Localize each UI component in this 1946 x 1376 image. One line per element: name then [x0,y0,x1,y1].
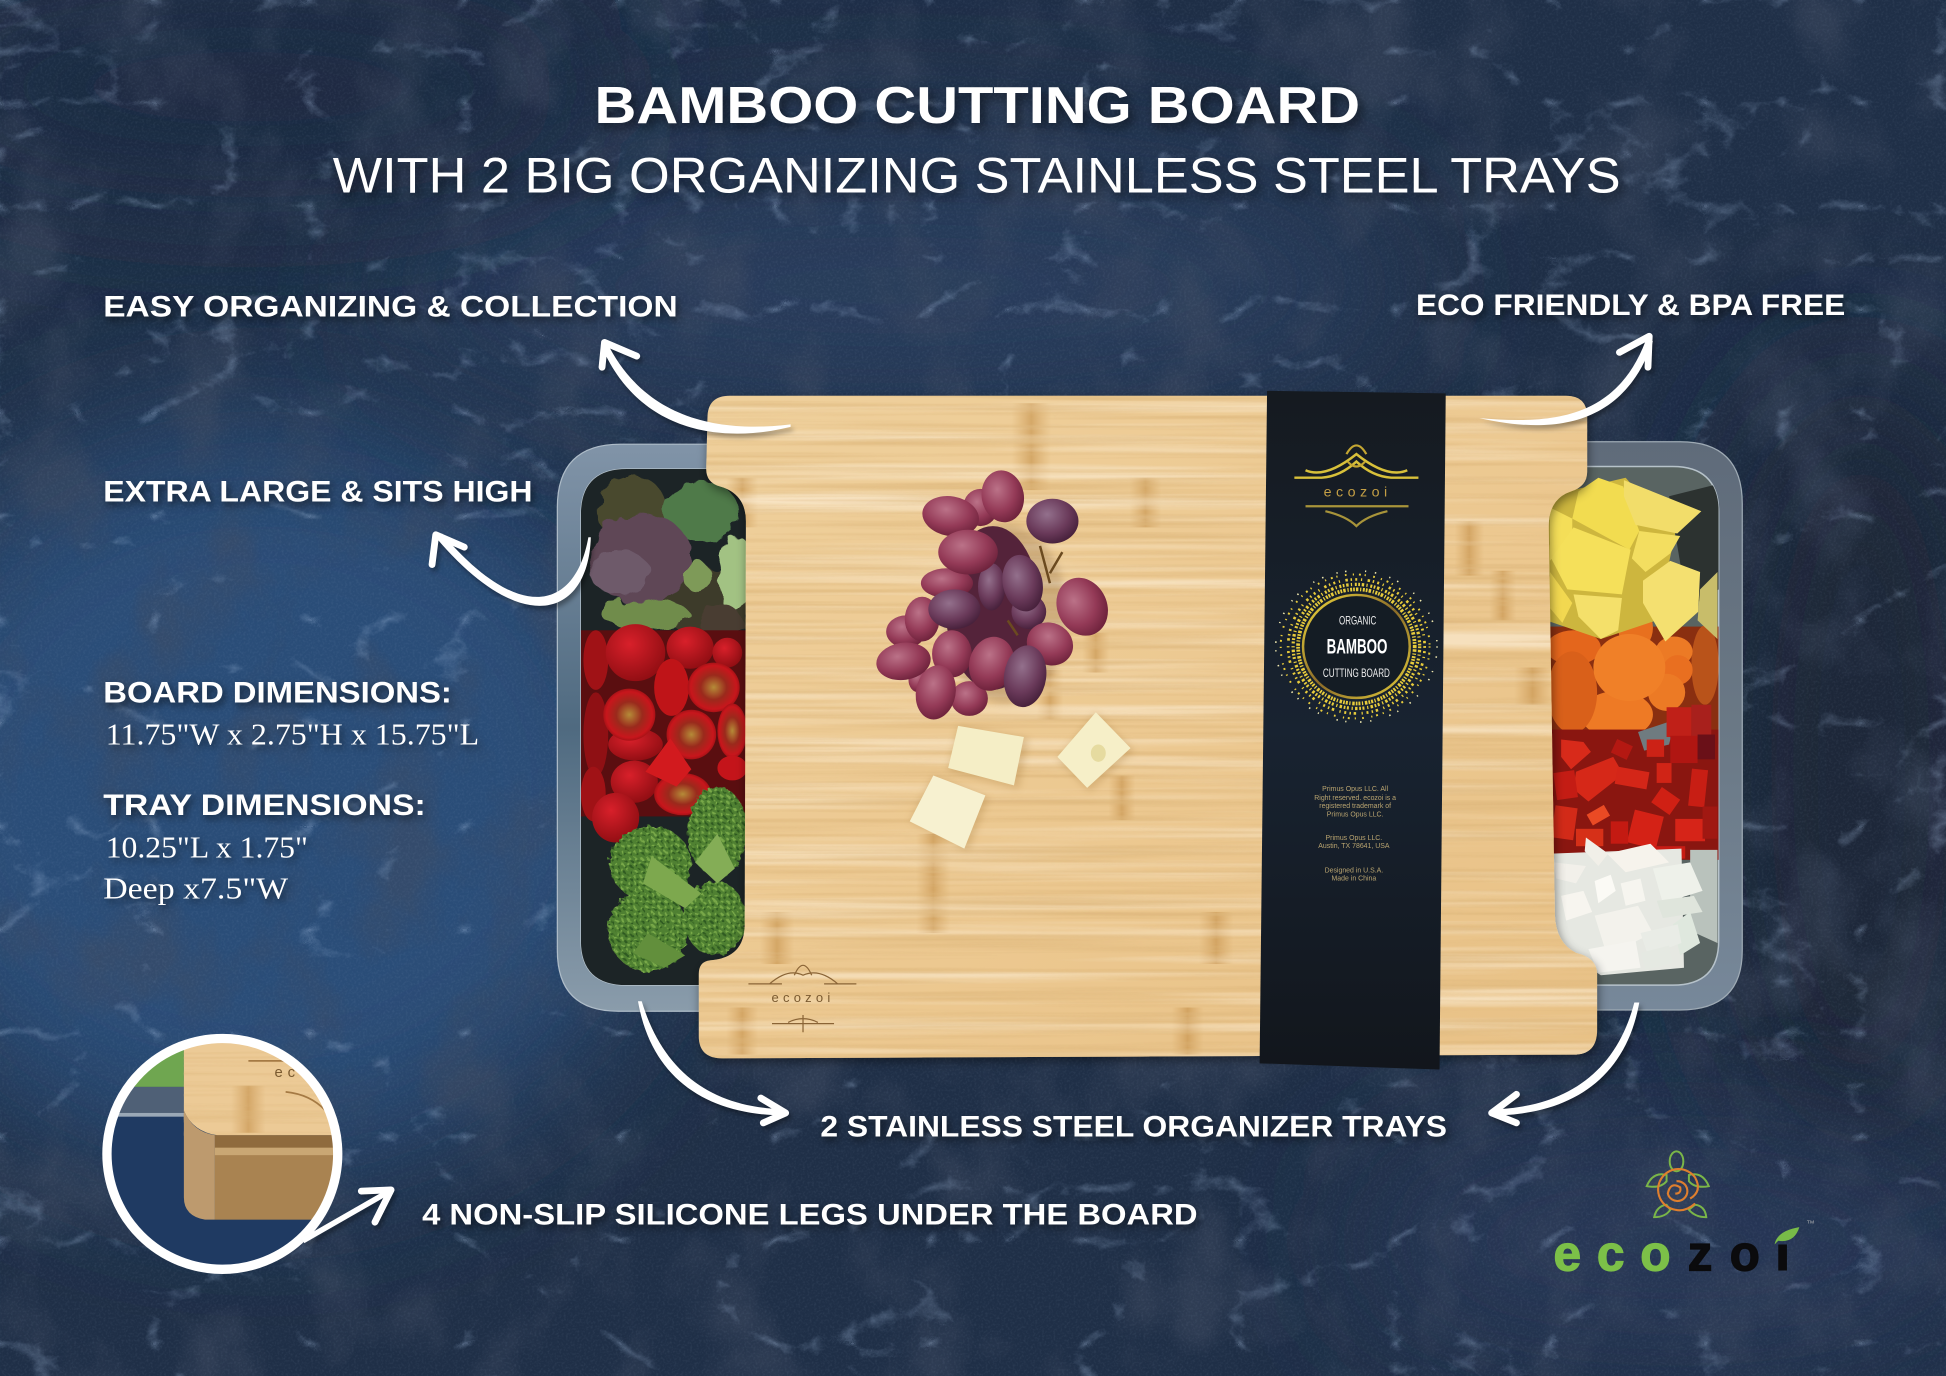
arrow: to easy organizing [602,342,791,434]
dimensions text block: TRAY DIMENSIONS: [103,789,426,822]
right tray food [1546,478,1719,975]
gold brand logo: ecozoi [1324,484,1392,500]
cheese cubes [910,712,1134,851]
dimensions text block: 11.75"W x 2.75"H x 15.75"L [106,716,479,751]
left tray food [581,469,755,985]
arrow: left tray [638,1001,786,1123]
gold glitter [1276,571,1437,722]
wordmark: e [1554,1226,1581,1282]
carrots [1550,622,1719,744]
red peppers [1551,705,1719,860]
bamboo cutting board [695,391,1601,1061]
detail circle: board leg: ec [274,1065,300,1081]
wordmark: TM [1807,1219,1814,1225]
potatoes [1546,478,1717,641]
onions [1551,838,1717,975]
label: trays: 2 STAINLESS STEEL ORGANIZER TRAYS [820,1111,1447,1144]
arrow: to eco friendly [1479,336,1653,425]
left steel tray [557,444,745,1011]
wordmark [1554,1219,1814,1282]
oval badge [1303,595,1410,698]
icon: turtle [1647,1151,1709,1217]
legal text: Austin, TX 78641, USA [1318,843,1390,850]
ecozoi logo [1554,1151,1814,1282]
label: non-slip legs: 4 NON-SLIP SILICONE LEGS UNDER THE BOARD [422,1199,1198,1232]
legal text: Primus Opus LLC. [1326,835,1382,842]
black product band: BAMBOO [1327,635,1387,658]
black product band [1260,391,1446,1070]
label: easy organizing: EASY ORGANIZING & COLLECTION [103,290,678,323]
label: eco friendly: ECO FRIENDLY & BPA FREE [1416,289,1845,322]
legal text: Primus Opus LLC. [1327,811,1384,818]
wordmark: o [1730,1226,1760,1282]
arrow: from circle to legs label [303,1190,391,1241]
arrow: right tray [1492,1003,1639,1123]
legal text: registered trademark of [1319,803,1391,810]
gold brand logo [1294,445,1418,526]
dimensions text block: 10.25"L x 1.75" [106,829,308,864]
legal text: Right reserved. ecozoi is a [1314,795,1396,802]
title: WITH 2 BIG ORGANIZING STAINLESS STEEL TRAYS [333,147,1621,203]
title: BAMBOO CUTTING BOARD [595,77,1360,135]
lettuce [588,476,755,637]
legal text: Primus Opus LLC. All [1322,786,1389,793]
dimensions text block: Deep x7.5"W [103,870,289,905]
broccoli [608,787,747,972]
legal text: Made in China [1332,875,1376,882]
legal text [1314,786,1396,882]
engraved board logo [748,965,856,1032]
legal text: Designed in U.S.A. [1325,867,1383,874]
black product band: CUTTING BOARD [1323,666,1390,680]
tomatoes [581,624,751,842]
label: extra large: EXTRA LARGE & SITS HIGH [103,475,533,508]
dimensions text block [103,676,479,905]
wordmark: c [1597,1226,1625,1282]
grapes [874,467,1117,723]
title [333,77,1621,203]
wordmark: z [1688,1226,1712,1282]
wordmark: o [1640,1226,1671,1282]
engraved board logo: ecozoi [772,990,834,1005]
dimensions text block: BOARD DIMENSIONS: [103,676,452,709]
black product band: ORGANIC [1339,614,1376,628]
arrow: to extra large [432,534,591,606]
detail circle: board leg [100,1030,348,1278]
right steel tray [1539,442,1742,1010]
